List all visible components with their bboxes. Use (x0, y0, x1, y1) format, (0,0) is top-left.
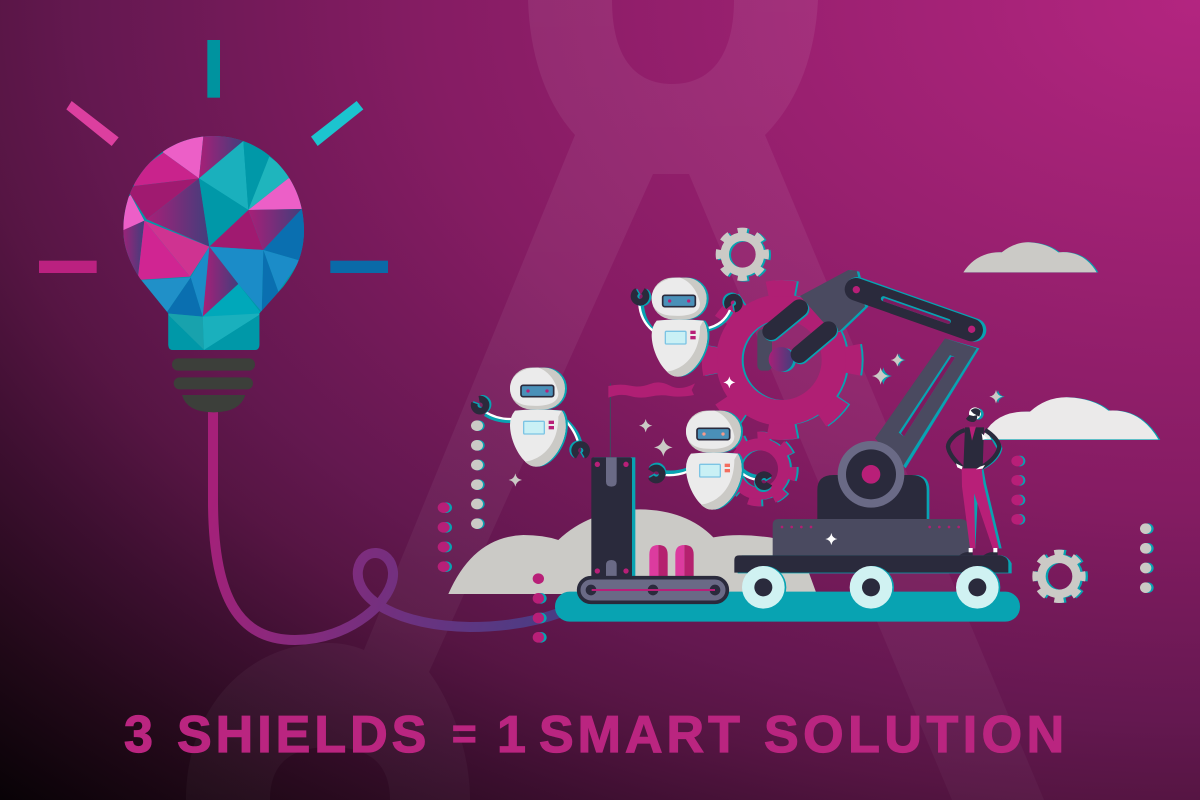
sparkles (509, 419, 673, 487)
title: SOLUTION (764, 706, 1069, 764)
legs (962, 468, 999, 548)
grey finger (757, 329, 772, 371)
icon: polygon light bulb (120, 130, 310, 412)
bulb screw base (172, 358, 255, 412)
arm base (820, 475, 929, 519)
cloud: white (982, 397, 1160, 440)
cloud: grey (963, 242, 1098, 272)
conveyor tower (591, 457, 635, 577)
robot arm (757, 270, 979, 519)
robot left (472, 368, 587, 467)
head (972, 408, 984, 420)
dot column: magenta middle (533, 573, 547, 643)
flag (608, 382, 695, 457)
conveyor belt (579, 578, 727, 602)
upper arm (857, 289, 975, 330)
cable from bulb to platform (213, 412, 562, 640)
robot scene, left part (438, 230, 1020, 643)
robot arm, man and clouds (723, 242, 1160, 609)
icon: grey gear bottom (1035, 552, 1085, 600)
gripped ball (772, 348, 796, 372)
dot column: grey right (1140, 523, 1154, 593)
dot column: magenta right (1011, 456, 1025, 525)
icon: large magenta gear (710, 288, 856, 432)
claws (771, 308, 829, 356)
dot column: magenta left (438, 502, 452, 572)
watermark compass shape (186, 0, 1044, 800)
icon: grey gear top (718, 230, 768, 279)
icon: light bulb rays (39, 40, 388, 273)
claw body (802, 270, 868, 333)
title: = (452, 710, 481, 757)
torso (963, 427, 984, 468)
man standing (948, 407, 1002, 555)
robot top (634, 278, 741, 377)
title: 1 (497, 706, 530, 764)
dot column: grey (471, 420, 485, 529)
tie (969, 427, 976, 441)
icon: small magenta gear (721, 431, 799, 507)
lower arm (878, 339, 979, 468)
sparkles (723, 353, 1005, 545)
shoes (959, 552, 998, 555)
hands (956, 433, 987, 469)
pink tubes (649, 545, 694, 576)
arms (948, 430, 999, 467)
hill (448, 509, 817, 594)
title: SMART (539, 706, 744, 764)
title: 3 (124, 706, 157, 764)
title: SHIELDS (177, 706, 430, 764)
wheels (742, 566, 1000, 609)
robot bottom (651, 411, 769, 510)
teal platform (555, 592, 1020, 622)
teal shadow (967, 428, 1002, 548)
machine carriage (734, 519, 1012, 573)
